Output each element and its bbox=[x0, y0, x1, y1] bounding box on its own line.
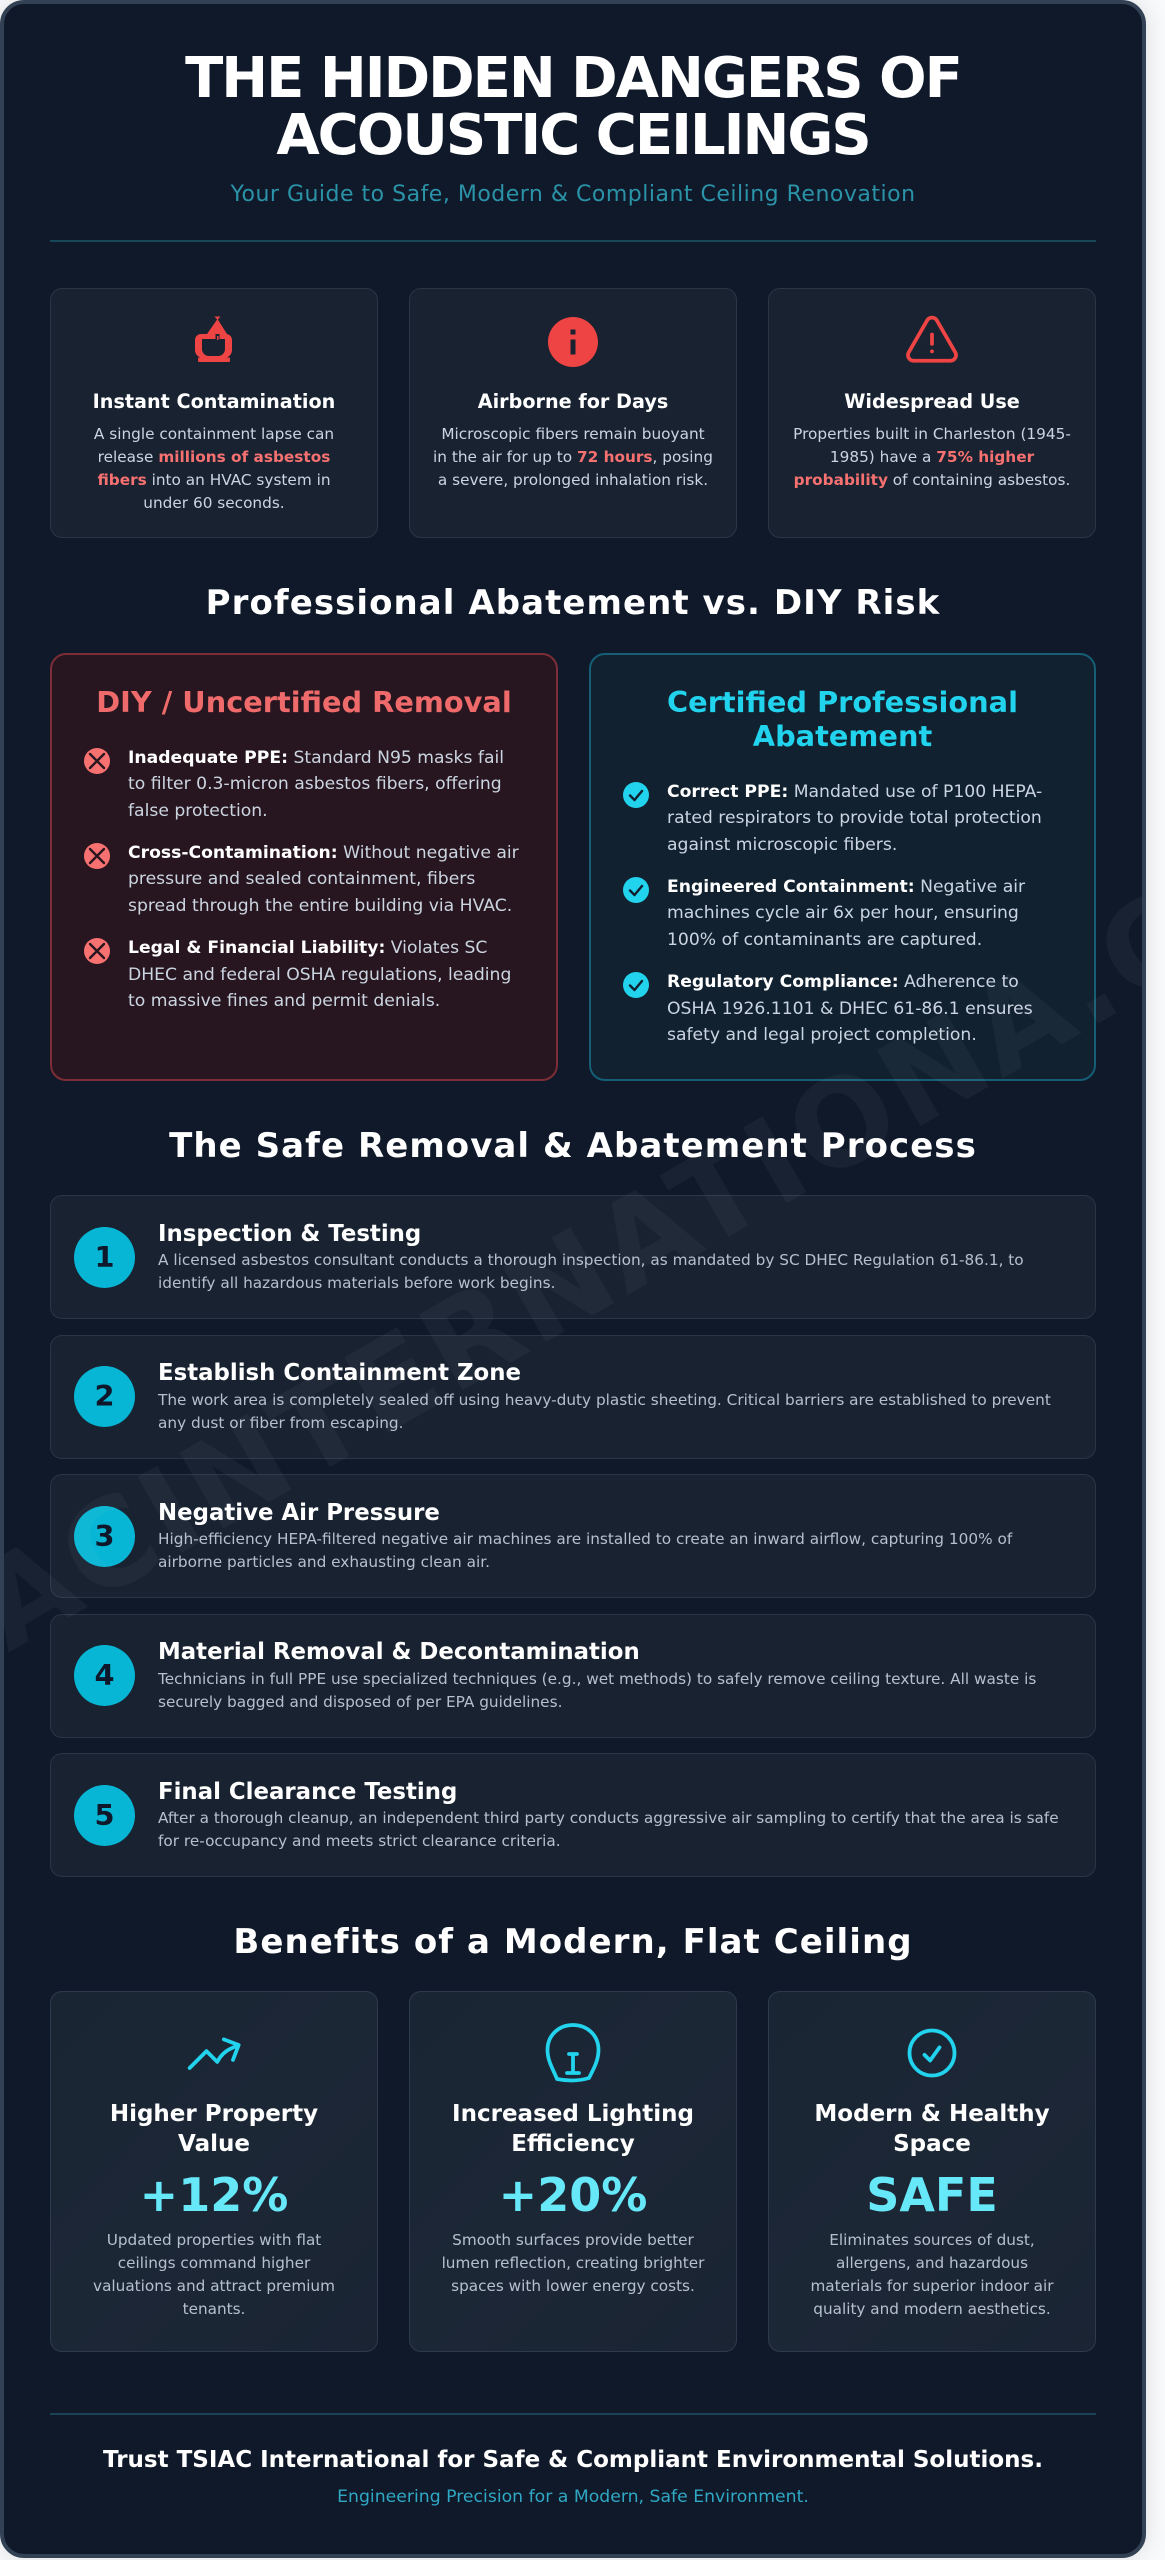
panel: instant contamination bbox=[50, 288, 378, 538]
benefit title: Higher Property bbox=[110, 2101, 318, 2127]
panel heading: Abatement bbox=[753, 719, 932, 753]
step title: Negative Air Pressure bbox=[158, 1500, 440, 1526]
item text bbox=[667, 972, 1033, 1045]
step 3 bbox=[50, 1474, 1096, 1598]
benefit text bbox=[810, 2231, 1054, 2318]
card heading: Instant Contamination bbox=[93, 390, 335, 413]
icon: cross bbox=[84, 938, 110, 964]
item: regulatory compliance bbox=[623, 972, 1033, 1045]
heading: professional vs DIY: Professional Abatement vs. DIY Risk bbox=[206, 583, 940, 623]
benefit stat: +12% bbox=[140, 2168, 288, 2222]
step description: securely bagged and disposed of per EPA guidelines. bbox=[158, 1692, 562, 1710]
icon: contamination bbox=[195, 316, 232, 362]
step 1 bbox=[50, 1195, 1096, 1319]
card text: Microscopic fibers remain buoyant bbox=[441, 425, 705, 443]
item text bbox=[128, 748, 504, 821]
item text bbox=[667, 782, 1042, 855]
footer tagline: Engineering Precision for a Modern, Safe Environment. bbox=[337, 2487, 809, 2507]
card text: release millions of asbestos bbox=[98, 448, 330, 466]
card heading: Widespread Use bbox=[844, 390, 1020, 413]
panel: airborne for days bbox=[409, 288, 737, 538]
item: cross-contamination bbox=[84, 843, 519, 916]
item text bbox=[667, 877, 1026, 950]
step number: 2 bbox=[94, 1379, 115, 1413]
step description bbox=[158, 1670, 1036, 1710]
benefit title: Increased Lighting bbox=[452, 2101, 694, 2127]
card text: in the air for up to 72 hours, posing bbox=[433, 448, 713, 466]
card text: under 60 seconds. bbox=[143, 494, 285, 512]
item text bbox=[128, 938, 511, 1011]
step number bbox=[74, 1784, 135, 1846]
step description bbox=[158, 1530, 1013, 1571]
panel: healthy space bbox=[768, 1991, 1096, 2352]
step description: A licensed asbestos consultant conducts a thorough inspection, as mandated by SC DHEC Regulation 61-86.1, to bbox=[158, 1251, 1024, 1269]
item: engineered containment bbox=[623, 877, 1026, 950]
step number: 1 bbox=[94, 1240, 115, 1274]
icon: cross bbox=[84, 843, 110, 869]
step number bbox=[74, 1645, 135, 1706]
step number: 4 bbox=[94, 1658, 115, 1692]
panel: certified professional bbox=[589, 653, 1096, 1081]
title: THE HIDDEN DANGERS OF bbox=[185, 46, 961, 111]
step description: The work area is completely sealed off using heavy-duty plastic sheeting. Critical barriers are established to prevent bbox=[158, 1390, 1051, 1408]
benefit text: Updated properties with flat bbox=[107, 2231, 321, 2249]
benefit text: Smooth surfaces provide better bbox=[452, 2231, 694, 2249]
benefit text: allergens, and hazardous bbox=[836, 2254, 1028, 2272]
step description: Technicians in full PPE use specialized techniques (e.g., wet methods) to safely remove ceiling texture. All waste is bbox=[158, 1670, 1036, 1688]
card text bbox=[793, 425, 1071, 489]
title bbox=[185, 46, 961, 168]
benefit text bbox=[442, 2231, 704, 2295]
icon: check bbox=[623, 972, 649, 998]
icon: check circle bbox=[908, 2028, 956, 2078]
step number bbox=[74, 1506, 135, 1566]
step number bbox=[74, 1226, 135, 1288]
step title: Establish Containment Zone bbox=[158, 1360, 521, 1386]
item: inadequate PPE bbox=[84, 748, 504, 821]
benefit text: Eliminates sources of dust, bbox=[829, 2231, 1035, 2249]
benefit title bbox=[110, 2101, 318, 2157]
subtitle: Your Guide to Safe, Modern & Compliant Ceiling Renovation bbox=[230, 182, 916, 207]
step description: any dust or fiber from escaping. bbox=[158, 1414, 404, 1432]
panel: widespread use bbox=[768, 288, 1096, 538]
step number bbox=[74, 1366, 135, 1427]
step description: identify all hazardous materials before work begins. bbox=[158, 1274, 555, 1292]
benefit title bbox=[814, 2101, 1050, 2157]
item text: Cross-Contamination: Without negative air bbox=[128, 843, 519, 863]
benefit text: valuations and attract premium bbox=[93, 2277, 335, 2295]
item text: Legal & Financial Liability: Violates SC bbox=[128, 938, 487, 958]
panel heading: DIY / Uncertified Removal bbox=[96, 685, 512, 719]
card text: 1985) have a 75% higher bbox=[830, 448, 1034, 466]
item text: machines cycle air 6x per hour, ensuring bbox=[667, 903, 1019, 923]
step description: for re-occupancy and meets strict clearance criteria. bbox=[158, 1832, 561, 1850]
benefit text: tenants. bbox=[183, 2300, 245, 2318]
benefit title: Efficiency bbox=[511, 2131, 635, 2157]
benefit text: spaces with lower energy costs. bbox=[451, 2277, 695, 2295]
benefit title: Modern & Healthy bbox=[814, 2101, 1050, 2127]
icon: trending up bbox=[188, 2037, 241, 2070]
panel heading bbox=[667, 685, 1018, 753]
item text: OSHA 1926.1101 & DHEC 61-86.1 ensures bbox=[667, 999, 1033, 1019]
step 2 bbox=[50, 1334, 1096, 1458]
step 4 bbox=[50, 1614, 1096, 1738]
step 5 bbox=[50, 1753, 1096, 1877]
benefit stat: +20% bbox=[499, 2168, 647, 2222]
item text: DHEC and federal OSHA regulations, leading bbox=[128, 965, 511, 985]
benefit stat: SAFE bbox=[866, 2168, 998, 2222]
step description: High-efficiency HEPA-filtered negative air machines are installed to create an inward airflow, capturing 100% of bbox=[158, 1530, 1012, 1548]
panel: lighting efficiency bbox=[409, 1991, 737, 2352]
benefit title bbox=[452, 2101, 694, 2157]
icon: check bbox=[623, 877, 649, 903]
item text: false protection. bbox=[128, 801, 268, 821]
step title: Final Clearance Testing bbox=[158, 1778, 457, 1804]
item text: Correct PPE: Mandated use of P100 HEPA- bbox=[667, 782, 1042, 802]
item text: Engineered Containment: Negative air bbox=[667, 877, 1025, 897]
card text: a severe, prolonged inhalation risk. bbox=[438, 471, 708, 489]
benefit text: quality and modern aesthetics. bbox=[813, 2300, 1051, 2318]
step description: airborne particles and exhausting clean air. bbox=[158, 1553, 490, 1571]
step number: 3 bbox=[94, 1518, 115, 1552]
card text: Properties built in Charleston (1945- bbox=[793, 425, 1071, 443]
benefit text bbox=[93, 2231, 335, 2318]
card heading: Airborne for Days bbox=[478, 390, 668, 413]
item: correct PPE bbox=[623, 782, 1042, 855]
step description: After a thorough cleanup, an independent third party conducts aggressive air sampling to certify that the area is safe bbox=[158, 1809, 1059, 1827]
panel: property value bbox=[50, 1991, 378, 2352]
icon: info bbox=[548, 317, 598, 367]
item text: Regulatory Compliance: Adherence to bbox=[667, 972, 1019, 992]
item text: Inadequate PPE: Standard N95 masks fail bbox=[128, 748, 504, 768]
heading: benefits: Benefits of a Modern, Flat Ceiling bbox=[233, 1922, 913, 1962]
panel heading: Certified Professional bbox=[667, 685, 1018, 719]
card text bbox=[94, 425, 334, 512]
step number: 5 bbox=[94, 1798, 115, 1832]
card text: fibers into an HVAC system in bbox=[97, 471, 331, 489]
card text bbox=[433, 425, 713, 489]
step description bbox=[158, 1809, 1059, 1850]
item text bbox=[128, 843, 519, 916]
item text: safety and legal project completion. bbox=[667, 1025, 977, 1045]
icon: cross bbox=[84, 748, 110, 774]
step description bbox=[158, 1390, 1051, 1432]
heading: process: The Safe Removal & Abatement Process bbox=[169, 1126, 977, 1166]
title: ACOUSTIC CEILINGS bbox=[276, 103, 870, 168]
icon: light bulb bbox=[546, 2023, 600, 2082]
item text: 100% of contaminants are captured. bbox=[667, 930, 982, 950]
panel: DIY removal bbox=[50, 653, 558, 1081]
footer statement: Trust TSIAC International for Safe & Compliant Environmental Solutions. bbox=[103, 2447, 1043, 2473]
item text: to massive fines and permit denials. bbox=[128, 991, 440, 1011]
item text: rated respirators to provide total protection bbox=[667, 808, 1042, 828]
card text: A single containment lapse can bbox=[94, 425, 334, 443]
item text: pressure and sealed containment, fibers bbox=[128, 869, 475, 889]
benefit text: materials for superior indoor air bbox=[810, 2277, 1054, 2295]
step description bbox=[158, 1251, 1024, 1292]
step title: Inspection & Testing bbox=[158, 1220, 421, 1246]
icon: check bbox=[623, 782, 649, 808]
card text: probability of containing asbestos. bbox=[794, 471, 1070, 489]
benefit text: lumen reflection, creating brighter bbox=[442, 2254, 704, 2272]
item text: to filter 0.3-micron asbestos fibers, offering bbox=[128, 774, 502, 794]
item text: spread through the entire building via HVAC. bbox=[128, 896, 512, 916]
benefit title: Value bbox=[178, 2131, 250, 2157]
benefit text: ceilings command higher bbox=[118, 2254, 310, 2272]
item: legal liability bbox=[84, 938, 511, 1011]
benefit title: Space bbox=[893, 2131, 971, 2157]
step title: Material Removal & Decontamination bbox=[158, 1639, 640, 1665]
icon: warning triangle bbox=[906, 316, 958, 363]
item text: against microscopic fibers. bbox=[667, 835, 897, 855]
